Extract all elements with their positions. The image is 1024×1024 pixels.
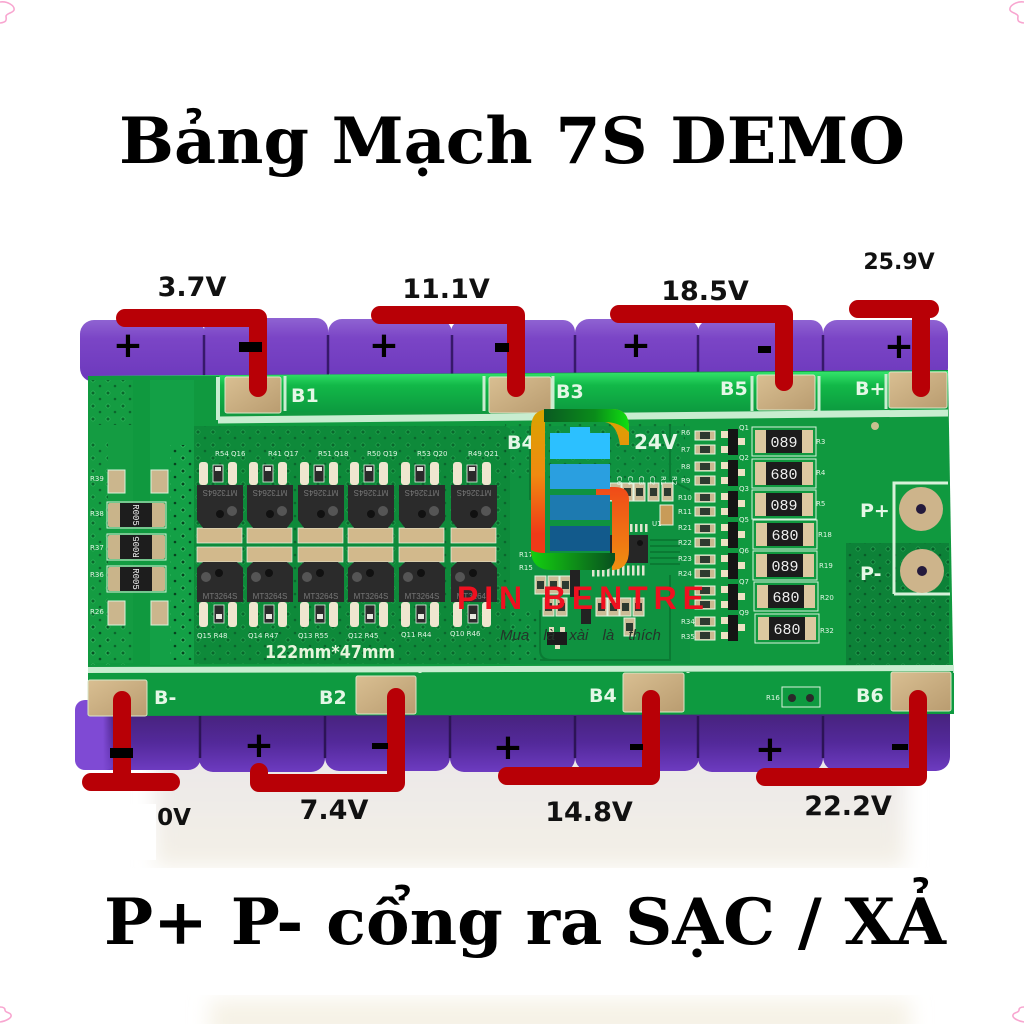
balance transistors: R11 <box>678 508 692 516</box>
control area circuitry <box>505 424 690 664</box>
MOSFET bottom row: Q13 R55 <box>298 632 328 640</box>
balance transistors: R23 <box>678 555 692 563</box>
MOSFET bottom row <box>197 547 497 640</box>
big sense resistors: 680 <box>770 467 798 484</box>
MOSFET bottom row: Q14 R47 <box>248 632 278 640</box>
red wire: 0V <box>91 700 171 782</box>
balance transistors: R24 <box>678 570 692 578</box>
MOSFET top row: R53 Q20 <box>417 450 447 458</box>
control area circuitry: R1 <box>659 476 667 485</box>
MOSFET bottom row: Q15 R48 <box>197 632 227 640</box>
MOSFET top row: R54 Q16 <box>215 450 246 458</box>
big sense resistors: 089 <box>770 435 798 452</box>
balance transistors: R22 <box>678 539 692 547</box>
polarity marks: + <box>884 326 914 367</box>
control area circuitry: U1 <box>652 520 662 528</box>
MOSFET bottom row: MT3264S <box>354 592 388 601</box>
PCB board <box>88 370 954 716</box>
control area circuitry: C3 <box>637 476 645 485</box>
sense resistors R005: R37 <box>90 544 104 552</box>
MOSFET bottom row: Q10 R46 <box>450 630 481 638</box>
MOSFET bottom row: MT3264S <box>253 592 287 601</box>
sense resistors R005: R39 <box>90 475 104 483</box>
MOSFET top row: MT3264S <box>457 488 491 497</box>
balance transistors: R6 <box>681 429 691 437</box>
MOSFET bottom row: MT3264S <box>405 592 439 601</box>
polarity marks: + <box>621 325 651 366</box>
balance transistors <box>678 424 750 641</box>
balance transistors: Q5 <box>739 516 749 524</box>
board size marking: 122mm*47mm <box>265 642 395 663</box>
top terminal strip <box>90 371 948 412</box>
red wire: 14.8V <box>507 699 651 776</box>
sense resistors R005 <box>90 470 168 625</box>
control area circuitry: 24V <box>634 430 678 454</box>
MOSFET top row: MT3264S <box>405 488 439 497</box>
MOSFET bottom row: Q12 R45 <box>348 632 378 640</box>
polarity marks: + <box>755 729 785 770</box>
big sense resistors: 089 <box>770 498 798 515</box>
balance transistors: Q1 <box>739 424 749 432</box>
MOSFET top row: MT3264S <box>304 488 338 497</box>
balance transistors: R35 <box>681 633 695 641</box>
red wire: 25.9V <box>858 309 930 388</box>
voltage labels: 11.1V <box>402 274 490 305</box>
balance transistors: Q3 <box>739 485 749 493</box>
control area circuitry: C6 <box>615 476 623 486</box>
polarity marks: + <box>113 325 143 366</box>
terminal labels: B4 <box>589 685 617 707</box>
bottom terminal strip <box>88 673 954 716</box>
red wire: 18.5V <box>619 314 784 382</box>
P+ P- output port <box>846 422 950 665</box>
big sense resistors: R32 <box>820 627 834 635</box>
red wire: 3.7V <box>125 318 258 388</box>
big sense resistors: 680 <box>773 622 801 639</box>
terminal labels: B- <box>154 687 176 709</box>
MOSFET top row: R51 Q18 <box>318 450 348 458</box>
voltage labels: 18.5V <box>661 276 749 307</box>
sense resistors R005: R005 <box>130 568 140 590</box>
sense resistors R005: R26 <box>90 608 104 616</box>
MOSFET top row: R50 Q19 <box>367 450 397 458</box>
background tint bands <box>0 715 1024 1024</box>
MOSFET top row: MT3264S <box>203 488 237 497</box>
left copper strips <box>90 380 194 665</box>
voltage labels <box>157 250 935 831</box>
big sense resistors: R18 <box>818 531 832 539</box>
terminal labels: B6 <box>856 685 884 707</box>
MOSFET top row: MT3264S <box>253 488 287 497</box>
big sense resistors <box>752 427 834 643</box>
control area circuitry: R17 <box>519 551 533 559</box>
logo frame <box>531 409 629 570</box>
polarity marks: + <box>369 325 399 366</box>
slogan: Mua là xài là thích <box>500 627 661 644</box>
terminal labels: B+ <box>855 378 885 400</box>
polarity marks <box>110 325 914 770</box>
MOSFET bottom row: MT3264S <box>304 592 338 601</box>
balance transistors: R21 <box>678 524 692 532</box>
voltage labels: 7.4V <box>300 795 368 826</box>
big sense resistors: R5 <box>816 500 825 508</box>
balance transistors: R10 <box>678 494 692 502</box>
big sense resistors: R20 <box>820 594 834 602</box>
balance transistors: R9 <box>681 477 690 485</box>
P+ P- output port: P+ <box>860 500 890 522</box>
battery pack: top row of cells <box>80 318 948 382</box>
MOSFET bottom row: MT3264S <box>203 592 237 601</box>
terminal labels: B3 <box>556 381 584 403</box>
voltage labels: 14.8V <box>545 797 633 828</box>
balance transistors: Q7 <box>739 578 749 586</box>
copper solder pads <box>88 372 951 716</box>
big sense resistors: R4 <box>816 469 826 477</box>
sense resistors R005: R36 <box>90 571 104 579</box>
MOSFET bottom row: MT3264S <box>457 592 491 601</box>
polarity marks: + <box>493 727 523 768</box>
MOSFET top row: R49 Q21 <box>468 450 498 458</box>
footer caption: P+ P- cổng ra SẠC / XẢ <box>104 877 947 960</box>
terminal labels: B5 <box>720 378 748 400</box>
MOSFET top row: MT3264S <box>354 488 388 497</box>
voltage labels: 0V <box>157 805 191 831</box>
red wire: 11.1V <box>380 315 516 388</box>
title: Bảng Mạch 7S DEMO <box>119 104 905 179</box>
control area circuitry: R15 <box>519 564 533 572</box>
big sense resistors: 089 <box>771 559 799 576</box>
big sense resistors: R19 <box>819 562 833 570</box>
silk outline lines <box>88 374 954 714</box>
terminal labels: B2 <box>319 687 347 709</box>
brand name: PIN BENTRE <box>457 580 704 616</box>
terminal labels: R16 <box>766 694 780 702</box>
voltage labels: 22.2V <box>804 791 892 822</box>
sense resistors R005: R38 <box>90 510 104 518</box>
big sense resistors: R3 <box>816 438 825 446</box>
MOSFET copper area <box>194 426 530 664</box>
logo: PIN BENTRE battery <box>457 409 704 644</box>
MOSFET bottom row: Q11 R44 <box>401 631 432 639</box>
logo battery cells <box>550 427 610 551</box>
control area circuitry: B4 <box>507 432 535 454</box>
MOSFET top row: R41 Q17 <box>268 450 298 458</box>
control area circuitry: C2 <box>648 476 656 485</box>
MOSFET top row <box>197 450 498 543</box>
battery pack: bottom row of cells <box>75 700 950 772</box>
balance transistors: R7 <box>681 446 690 454</box>
big sense resistors: 680 <box>772 590 800 607</box>
control area circuitry: C4 <box>626 476 634 486</box>
terminal labels: B1 <box>291 385 319 407</box>
balance transistors: R34 <box>681 618 695 626</box>
P+ P- output port: P- <box>860 563 881 585</box>
balance transistors: Q6 <box>739 547 750 555</box>
polarity marks: + <box>244 725 274 766</box>
red wire: 7.4V <box>259 697 396 783</box>
voltage labels: 3.7V <box>158 272 226 303</box>
balance transistors: R8 <box>681 463 690 471</box>
balance transistors: Q2 <box>739 454 749 462</box>
control area circuitry: R2 <box>670 476 678 485</box>
big sense resistors: 680 <box>771 528 799 545</box>
red wire: 22.2V <box>765 699 918 777</box>
sense resistors R005: R005 <box>130 504 140 526</box>
voltage labels: 25.9V <box>863 250 935 275</box>
terminal labels <box>154 378 885 709</box>
sense resistors R005: R005 <box>132 536 142 558</box>
balance transistors: Q9 <box>739 609 749 617</box>
